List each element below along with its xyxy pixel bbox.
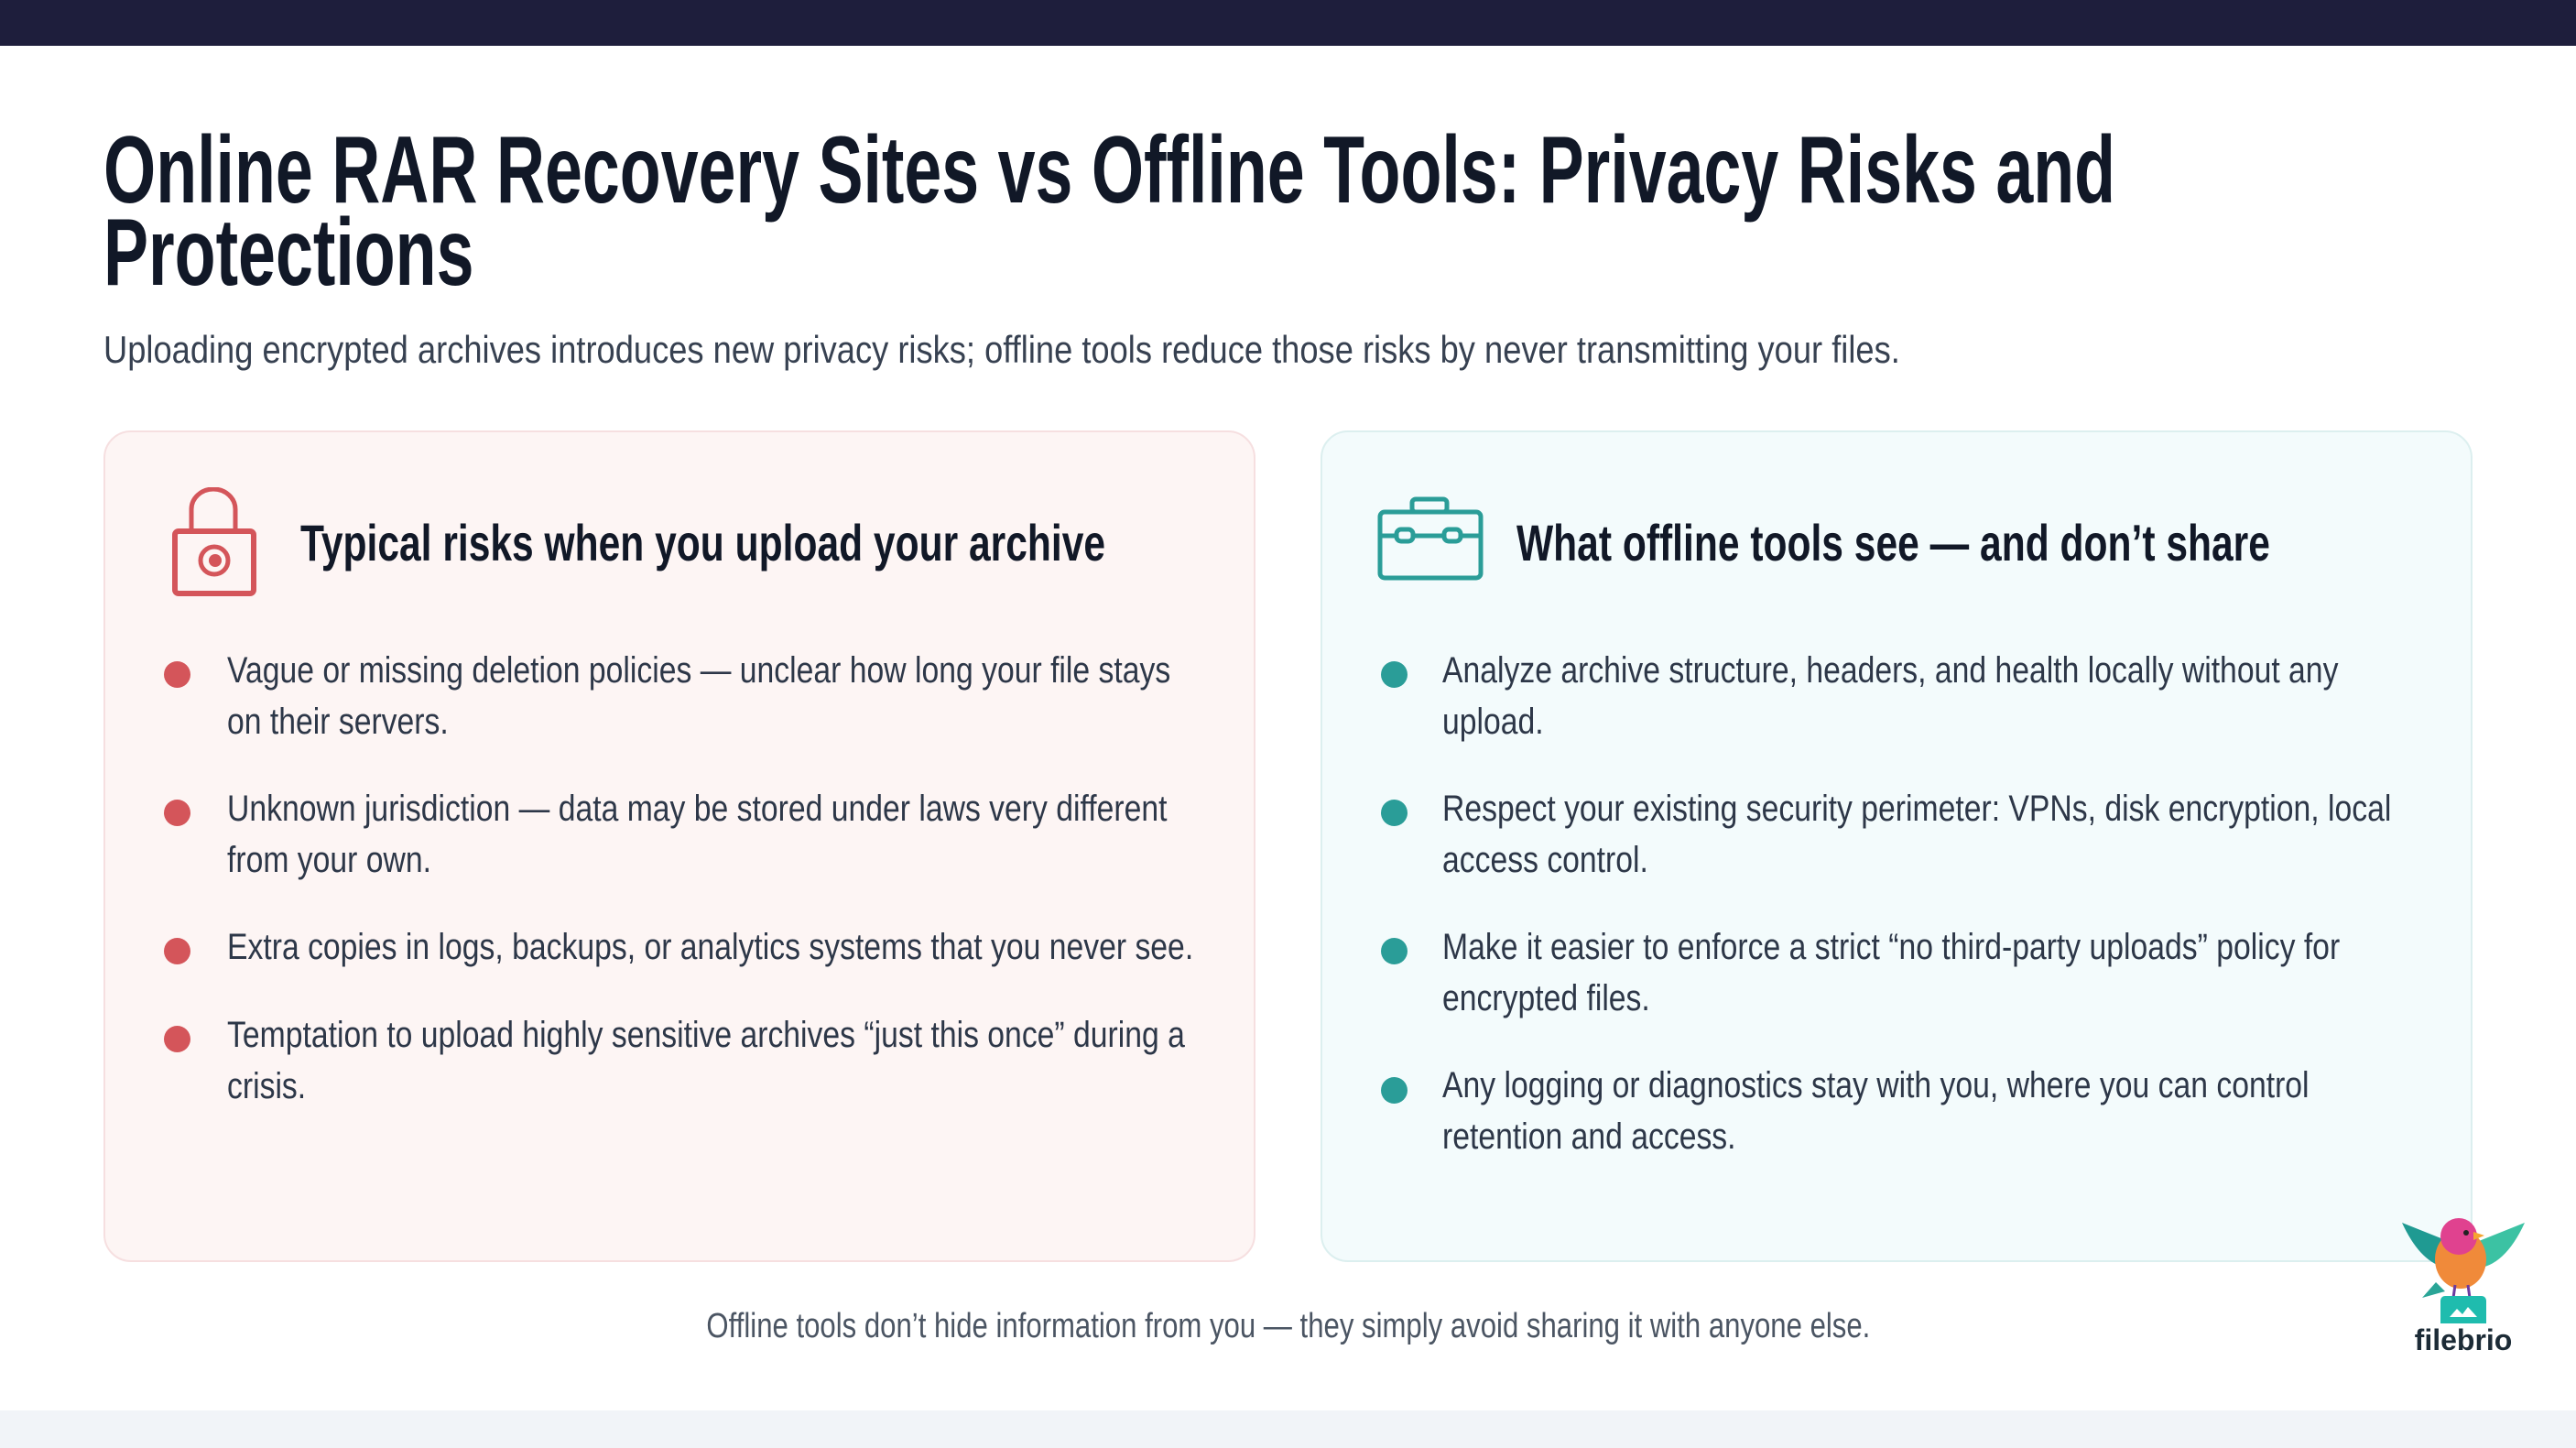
icon: lock: [172, 487, 256, 596]
subtitle: Uploading encrypted archives introduces new privacy risks; offline tools reduce those risks by never transmitting your files.: [103, 328, 1900, 371]
heading: offline: What offline tools see — and don’t share: [1516, 514, 2270, 572]
panel: offline tools: [1321, 430, 2473, 1262]
top bar: [0, 0, 2576, 46]
list: offline: encrypted files.: [1442, 978, 1650, 1018]
list: risks: Temptation to upload highly sensitive archives “just this once” during a: [227, 1015, 1185, 1055]
title: [103, 117, 2115, 306]
list: risks: from your own.: [227, 840, 431, 880]
list: risks: Vague or missing deletion policies — unclear how long your file stays: [227, 650, 1170, 691]
list: risks: [164, 650, 1193, 1106]
list: risks: Unknown jurisdiction — data may be stored under laws very different: [227, 789, 1167, 829]
title: Protections: [103, 200, 473, 306]
list: offline: Any logging or diagnostics stay with you, where you can control: [1442, 1065, 2310, 1105]
list: offline: access control.: [1442, 840, 1648, 880]
list: risks: crisis.: [227, 1066, 306, 1106]
list: risks: on their servers.: [227, 702, 449, 742]
list: offline: [1381, 650, 2391, 1157]
logo: filebrio: [2402, 1218, 2525, 1356]
list: offline: upload.: [1442, 702, 1544, 742]
logo: filebrio: filebrio: [2415, 1323, 2512, 1356]
list: risks: Extra copies in logs, backups, or analytics systems that you never see.: [227, 927, 1193, 967]
list: offline: Analyze archive structure, headers, and health locally without any: [1442, 650, 2338, 691]
heading: risks: Typical risks when you upload your archive: [300, 514, 1105, 572]
list: offline: Respect your existing security perimeter: VPNs, disk encryption, local: [1442, 789, 2391, 829]
list: offline: retention and access.: [1442, 1116, 1736, 1157]
icon: toolbox: [1377, 496, 1484, 581]
list: offline: Make it easier to enforce a strict “no third-party uploads” policy for: [1442, 927, 2340, 967]
footer note: Offline tools don’t hide information from you — they simply avoid sharing it with anyone else.: [706, 1307, 1870, 1345]
bottom strip: [0, 1410, 2576, 1448]
panel: risks: [103, 430, 1255, 1262]
title: Online RAR Recovery Sites vs Offline Tools: Privacy Risks and: [103, 117, 2115, 223]
